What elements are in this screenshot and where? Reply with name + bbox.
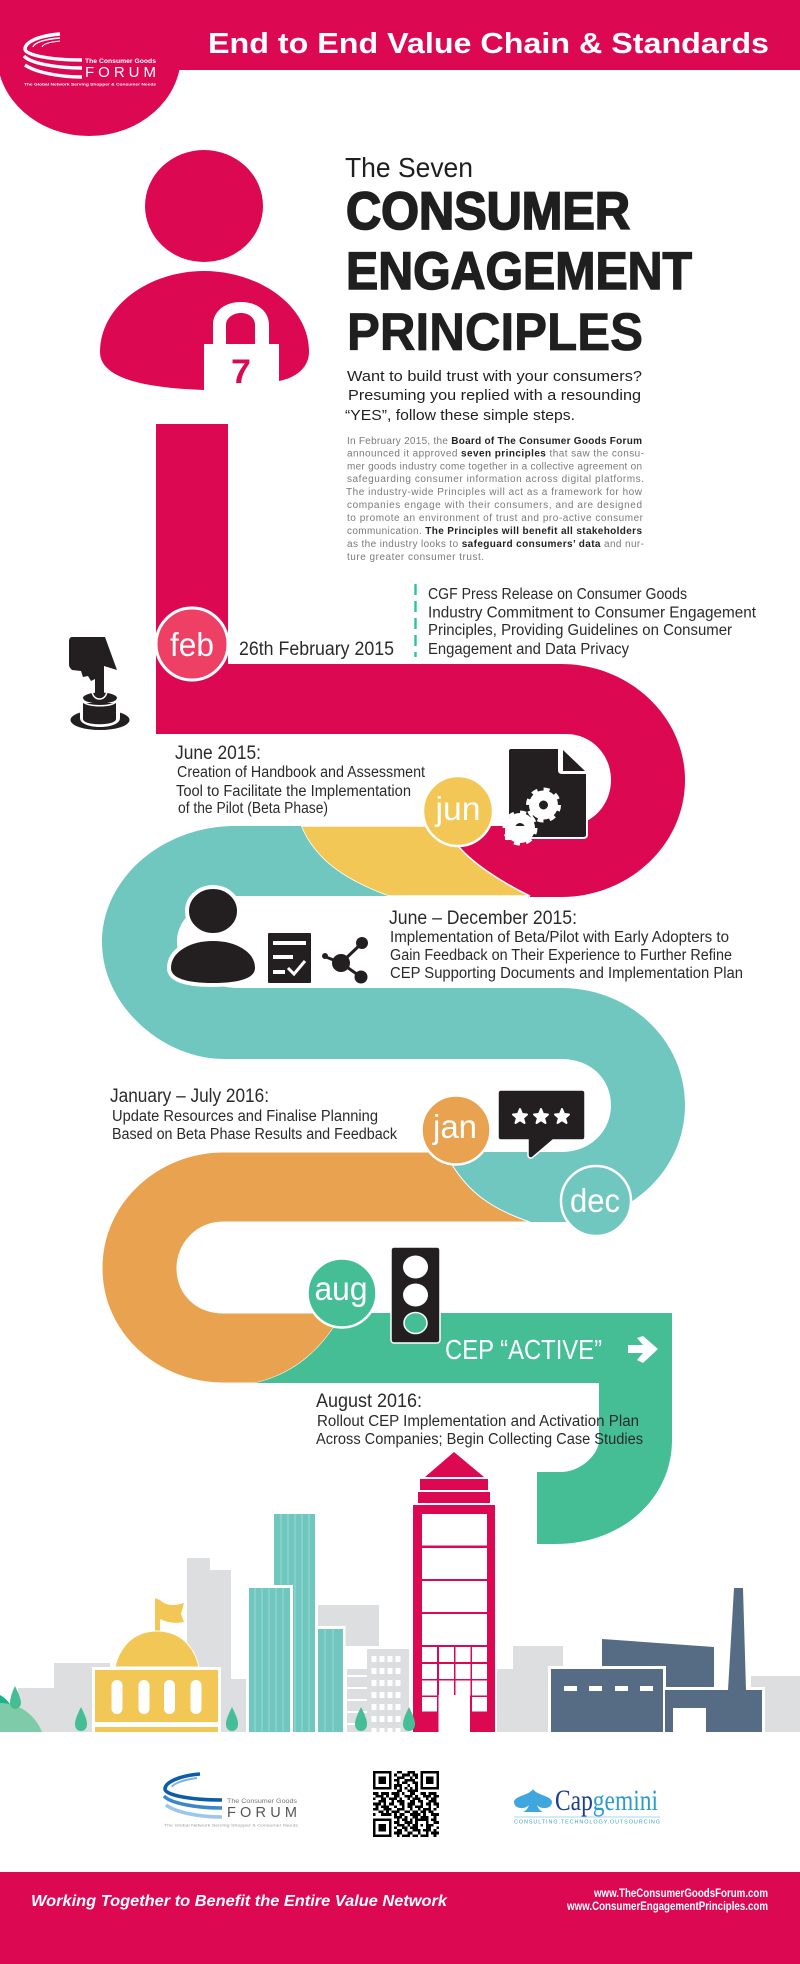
subheading: Presuming you replied with a resounding	[348, 387, 641, 404]
august 2016 text: August 2016:	[316, 1391, 422, 1412]
icon: traffic light	[391, 1247, 440, 1343]
subheading	[345, 368, 642, 424]
CEP active label: CEP “ACTIVE”	[445, 1334, 602, 1365]
icon: checklist	[268, 933, 311, 983]
road: green segment	[255, 1313, 672, 1544]
june-december text	[389, 908, 743, 982]
intro paragraph: communication. The Principles will benefit all stakeholders	[347, 526, 642, 537]
trees	[0, 1686, 415, 1732]
footer links: www.TheConsumerGoodsForum.com	[593, 1888, 768, 1900]
dashed divider	[414, 584, 417, 657]
august 2016 text: Across Companies; Begin Collecting Case Studies	[316, 1431, 643, 1448]
june 2015 text: June 2015:	[175, 743, 261, 764]
icon: share network	[322, 937, 368, 984]
august 2016 text: Rollout CEP Implementation and Activation Plan	[317, 1413, 639, 1430]
road: orange segment	[102, 1152, 530, 1383]
subheading: “YES”, follow these simple steps.	[345, 407, 575, 424]
header title: End to End Value Chain & Standards	[208, 28, 769, 60]
icon: person with padlock	[100, 150, 309, 391]
icon: speech bubble with stars	[498, 1090, 585, 1158]
june-december text: CEP Supporting Documents and Implementation Plan	[390, 965, 743, 982]
june 2015 text: Tool to Facilitate the Implementation	[176, 783, 411, 800]
dec marker	[561, 1166, 631, 1236]
red tower	[413, 1452, 495, 1732]
footer links	[566, 1888, 768, 1913]
intro paragraph: as the industry looks to safeguard consumers’ data and nur-	[347, 539, 644, 550]
grey background buildings	[18, 1558, 800, 1732]
QR code	[373, 1771, 439, 1837]
pale office block	[345, 1646, 411, 1732]
january-july text: Based on Beta Phase Results and Feedback	[112, 1126, 397, 1143]
partner logo: capgemini: Capgemini	[555, 1784, 658, 1817]
jan marker: jan	[432, 1108, 477, 1145]
press release text	[428, 586, 757, 658]
june 2015 text: Creation of Handbook and Assessment	[177, 764, 426, 781]
intro paragraph: companies engage with their consumers, and are designed	[347, 500, 642, 511]
june-december text: Implementation of Beta/Pilot with Early Adopters to	[390, 929, 729, 946]
arrow	[628, 1336, 658, 1363]
jan marker	[422, 1096, 490, 1164]
press release text: Principles, Providing Guidelines on Consumer	[428, 622, 732, 639]
intro paragraph: In February 2015, the Board of The Consumer Goods Forum	[347, 436, 642, 447]
press release text: Engagement and Data Privacy	[428, 641, 629, 658]
feb marker	[156, 608, 228, 680]
subheading: Want to build trust with your consumers?	[347, 368, 642, 385]
date label: 26th February 2015	[239, 639, 394, 660]
title: CONSUMER	[346, 182, 630, 241]
june-december text: June – December 2015:	[389, 908, 577, 929]
intro paragraph: to promote an environment of trust and pro-active consumer	[347, 513, 644, 524]
capitol	[92, 1598, 221, 1732]
january-july text: January – July 2016:	[110, 1086, 269, 1107]
aug marker: aug	[314, 1270, 368, 1307]
header band	[0, 0, 800, 136]
august 2016 text	[316, 1391, 643, 1448]
partner logo: capgemini	[514, 1784, 660, 1826]
press release text: Industry Commitment to Consumer Engagement	[428, 604, 757, 622]
header logo: The Consumer Goods	[85, 58, 156, 65]
partner logo: capgemini: CONSULTING.TECHNOLOGY.OUTSOURCING	[514, 1820, 660, 1826]
june-december text: Gain Feedback on Their Experience to Further Refine	[390, 947, 732, 964]
footer band	[0, 1872, 800, 1964]
road: teal segment	[102, 826, 685, 1222]
intro paragraph: mer goods industry come together in a collective agreement on	[347, 462, 642, 472]
january-july text: Update Resources and Finalise Planning	[112, 1108, 378, 1125]
jun marker	[423, 776, 493, 846]
header logo: FORUM	[85, 64, 156, 81]
title	[345, 152, 692, 362]
icon: person	[169, 887, 257, 985]
partner logo: consumer goods forum: The Consumer Goods	[227, 1798, 298, 1805]
dec marker: dec	[570, 1182, 620, 1219]
intro paragraph: The industry-wide Principles will act as a framework for how	[346, 487, 643, 498]
january-july text	[110, 1086, 397, 1143]
june 2015 text: of the Pilot (Beta Phase)	[178, 800, 328, 817]
icon: document with gears	[504, 748, 587, 844]
intro paragraph: ture greater consumer trust.	[347, 552, 484, 563]
june 2015 text	[175, 743, 426, 817]
intro paragraph: announced it approved seven principles that saw the consu-	[347, 448, 644, 460]
press release text: CGF Press Release on Consumer Goods	[428, 586, 687, 603]
road: magenta segment	[156, 424, 685, 897]
title: The Seven	[345, 152, 473, 183]
partner logo: consumer goods forum: The Global Network Serving Shopper & Consumer Needs	[164, 1822, 298, 1828]
header logo	[24, 34, 157, 86]
partner logo: consumer goods forum	[164, 1774, 298, 1828]
footer slogan: Working Together to Benefit the Entire Value Network	[31, 1893, 448, 1910]
partner logo: consumer goods forum: FORUM	[227, 1805, 297, 1821]
icon: hand pressing button	[69, 637, 130, 730]
header logo: The Global Network Serving Shopper & Consumer Needs	[24, 82, 157, 86]
intro paragraph	[346, 436, 644, 563]
title: ENGAGEMENT	[346, 242, 692, 301]
road: yellow segment	[301, 826, 530, 896]
title: PRINCIPLES	[347, 303, 643, 362]
icon: person with padlock: 7	[231, 353, 251, 391]
feb marker: feb	[170, 626, 214, 663]
intro paragraph: safeguarding consumer information across digital platforms.	[347, 474, 644, 485]
jun marker: jun	[434, 790, 480, 827]
aug marker	[308, 1258, 376, 1328]
footer links: www.ConsumerEngagementPrinciples.com	[566, 1901, 768, 1913]
teal towers	[247, 1514, 346, 1732]
factory	[548, 1588, 765, 1732]
city skyline	[0, 1452, 800, 1732]
